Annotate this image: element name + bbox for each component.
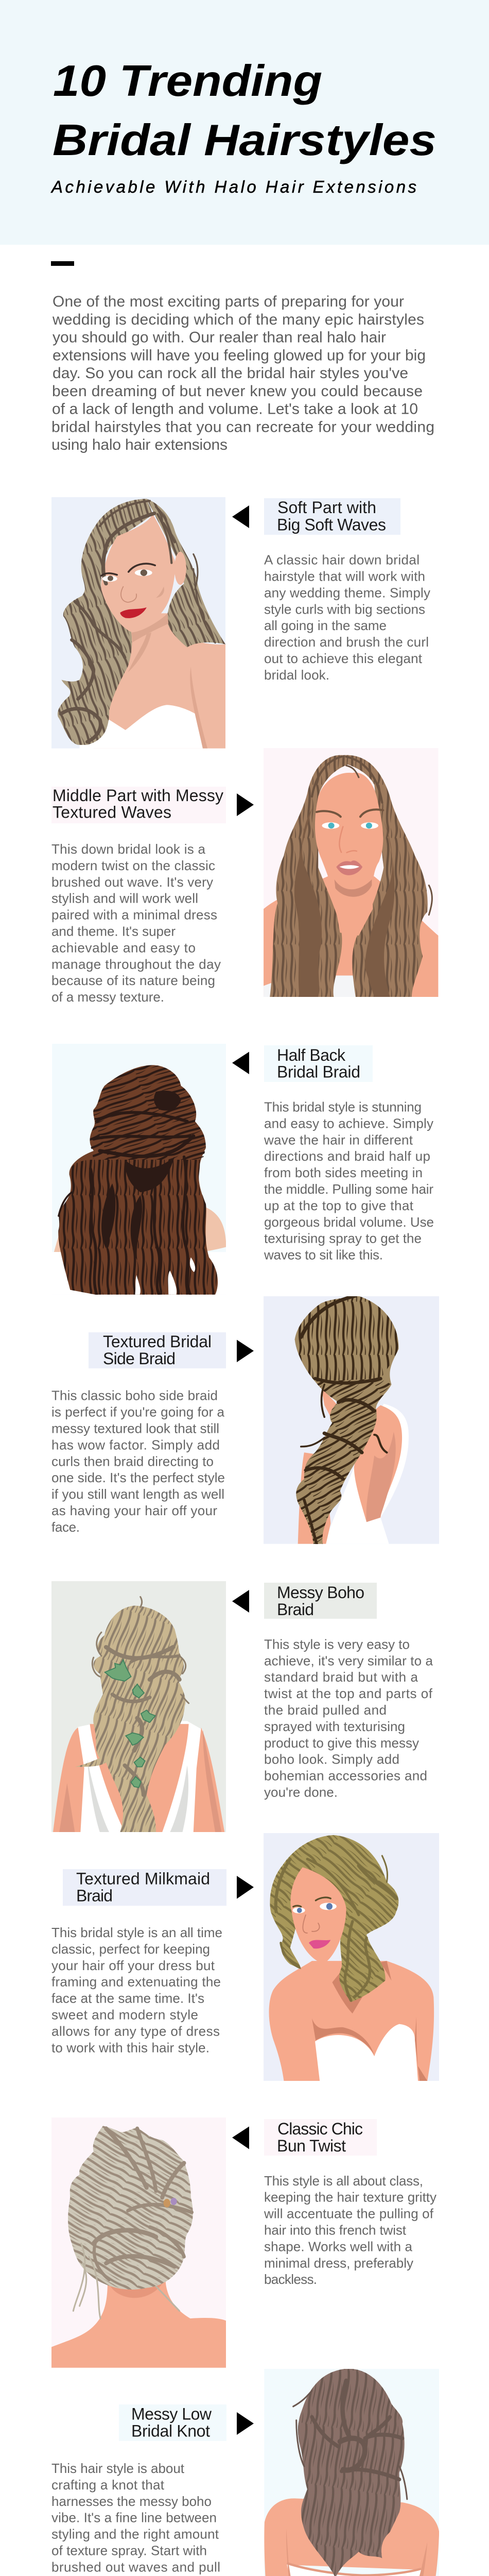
heading: Bun Twist [277,2137,346,2155]
body text: This down bridal look is a [51,841,206,857]
intro text: One of the most exciting parts of preparing for your [53,293,404,310]
heading: Side Braid [103,1349,176,1368]
body text: of texture spray. Start with [51,2543,207,2558]
body text: brushed out waves and pull [51,2559,220,2574]
body text: because of its nature being [51,973,215,988]
body text: and easy to achieve. Simply [264,1115,433,1131]
body text: paired with a minimal dress [51,907,217,923]
body text [51,841,221,1005]
body text: This style is very easy to [264,1636,410,1652]
body text: product to give this messy [264,1735,419,1751]
body text: will accentuate the pulling of [264,2206,434,2222]
body text: stylish and will work well [51,891,198,906]
section 1: soft part with big soft waves [51,497,430,749]
body text: bohemian accessories and [264,1768,427,1784]
intro text: you should go with. Our realer than real halo hair [53,329,386,346]
body text: harnesses the messy boho [51,2494,212,2509]
heading: Soft Part with [277,498,376,517]
body text: classic, perfect for keeping [51,1941,210,1957]
section 2: middle part with messy textured waves [51,748,438,1005]
heading: Bridal Braid [277,1062,360,1081]
body text: gorgeous bridal volume. Use [264,1214,434,1230]
illustration: bun twist [51,2117,226,2368]
body text [51,1925,222,2055]
heading: Textured Milkmaid [76,1869,210,1888]
intro text: extensions will have you feeling glowed up for your big [53,347,426,364]
body text: boho look. Simply add [264,1752,399,1767]
body text: the braid pulled and [264,1702,387,1718]
body text: bridal look. [264,667,329,683]
body text: if you still want length as well [51,1486,224,1502]
body text: This bridal style is stunning [264,1099,422,1115]
body text: keeping the hair texture gritty [264,2190,436,2205]
intro text: wedding is deciding which of the many epic hairstyles [52,311,424,328]
body text: minimal dress, preferably [264,2255,413,2270]
heading [264,498,400,535]
body text: crafting a knot that [51,2477,165,2493]
body text: manage throughout the day [51,956,221,972]
arrow: left [232,2127,249,2149]
body text: modern twist on the classic [51,858,215,873]
heading: Braid [76,1887,113,1905]
illustration: soft part waves [51,497,225,749]
body text: styling and the right amount [51,2527,219,2542]
illustration: middle part waves [264,748,438,997]
body text: sprayed with texturising [264,1719,405,1734]
body text: up at the top to give that [264,1198,414,1213]
body text: This classic boho side braid [51,1388,218,1403]
heading: Braid [277,1600,314,1619]
body text: curls then braid directing to [51,1453,214,1469]
heading [119,2404,226,2441]
intro text: using halo hair extensions [51,436,228,453]
heading: Messy Low [131,2404,212,2423]
body text: face at the same time. It's [51,1991,204,2006]
heading [51,786,226,823]
heading: Messy Boho [277,1583,364,1602]
illustration: side braid [264,1295,439,1544]
illustration: boho braid [51,1581,226,1832]
body text: to work with this hair style. [51,2040,209,2055]
body text [51,2461,224,2576]
section 4: textured bridal side braid [51,1295,439,1544]
body text: framing and extenuating the [51,1974,221,1990]
section 6: textured milkmaid braid [51,1833,439,2081]
heading [63,1869,226,1906]
body text [51,1388,225,1535]
body text: sweet and modern style [51,2007,198,2023]
header band [0,0,489,245]
body text: is perfect if you're going for a [51,1404,225,1420]
subtitle: Achievable With Halo Hair Extensions [50,177,416,196]
body text: achieve, it's very similar to a [264,1653,433,1668]
title: 10 Trending [53,57,322,106]
heading [264,2119,377,2156]
title: Bridal Hairstyles [53,116,436,165]
heading [264,1583,377,1619]
body text: standard braid but with a [264,1669,418,1685]
body text: style curls with big sections [264,601,425,617]
body text: achievable and easy to [51,940,196,955]
body text: allows for any type of dress [51,2023,220,2039]
body text: This style is all about class, [264,2173,423,2189]
illustration: milkmaid braid [264,1833,439,2081]
body text: vibe. It's a fine line between [51,2510,217,2526]
arrow: right [237,2412,254,2435]
body text [264,1636,433,1800]
body text: your hair off your dress but [51,1958,215,1973]
body text: and theme. It's super [51,923,176,939]
body text: This bridal style is an all time [51,1925,222,1940]
body text: of a messy texture. [51,989,164,1005]
body text: as having your hair off your [51,1503,217,1518]
body text: out to achieve this elegant [264,651,423,666]
arrow: left [232,1052,249,1074]
heading: Half Back [277,1046,346,1064]
body text: wave the hair in different [264,1132,413,1147]
arrow: right [237,793,254,816]
body text: the middle. Pulling some hair [264,1181,433,1197]
arrow: left [232,505,249,528]
body text [264,1099,434,1263]
heading: Bridal Knot [131,2422,210,2441]
section 3: half back bridal braid [52,1044,434,1295]
body text: from both sides meeting in [264,1165,423,1180]
body text: backless. [264,2272,317,2287]
body text: shape. Works well with a [264,2239,413,2254]
body text: twist at the top and parts of [264,1686,433,1701]
body text: hairstyle that will work with [264,569,425,584]
body text: directions and braid half up [264,1148,430,1164]
heading [264,1045,373,1082]
body text: face. [51,1519,80,1535]
intro text: day. So you can rock all the bridal hair styles you've [53,365,408,382]
heading: Textured Bridal [103,1332,212,1351]
body text: all going in the same [264,618,387,633]
body text [264,552,430,683]
body text: one side. It's the perfect style [51,1470,225,1485]
body text: A classic hair down bridal [264,552,420,568]
body text: This hair style is about [51,2461,185,2476]
body text: hair into this french twist [264,2223,407,2238]
body text [264,2173,436,2287]
body text: waves to sit like this. [264,1247,383,1263]
heading: Big Soft Waves [277,515,386,534]
title [53,57,436,165]
section 5: messy boho braid [51,1581,433,1832]
intro text: been dreaming of but never knew you could because [52,383,423,400]
body text: direction and brush the curl [264,634,429,650]
body text: any wedding theme. Simply [264,585,430,600]
accent bar [51,261,74,266]
section 7: classic chic bun twist [51,2117,436,2368]
body text: messy textured look that still [51,1421,219,1436]
illustration: half back braid [52,1044,226,1295]
heading [89,1332,226,1368]
intro text: bridal hairstyles that you can recreate for your wedding [51,418,434,435]
section 8: messy low bridal knot [51,2369,439,2576]
arrow: right [237,1340,254,1362]
body text: brushed out wave. It's very [51,874,213,890]
body text: has wow factor. Simply add [51,1437,220,1452]
intro text [51,293,434,453]
heading: Middle Part with Messy [53,786,223,805]
arrow: right [237,1876,254,1899]
arrow: left [232,1590,249,1613]
intro text: of a lack of length and volume. Let's take a look at 10 [52,401,418,417]
body text: you're done. [264,1785,338,1800]
heading: Classic Chic [277,2120,363,2138]
body text: texturising spray to get the [264,1231,422,1246]
illustration: low knot [264,2369,439,2576]
heading: Textured Waves [53,803,171,821]
